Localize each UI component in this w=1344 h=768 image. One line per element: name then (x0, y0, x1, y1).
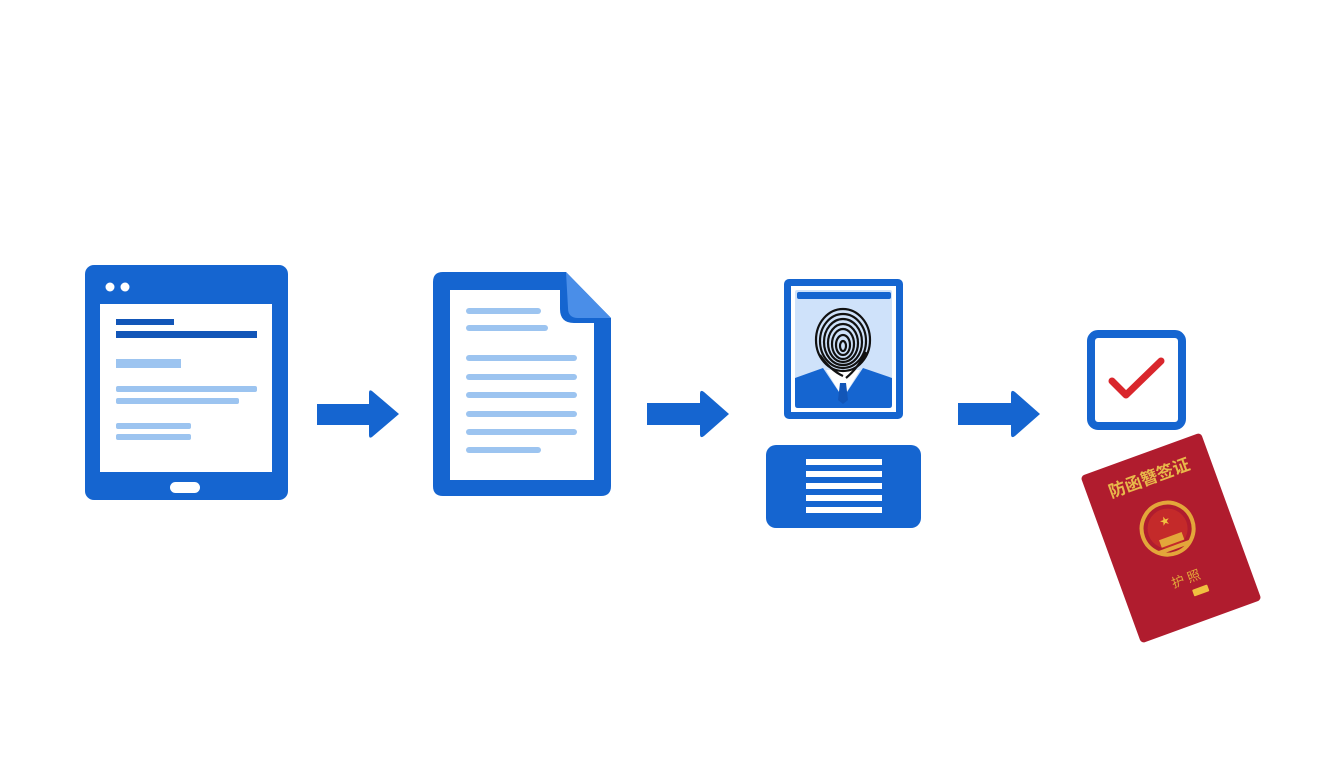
icon: checkbox (1091, 334, 1182, 426)
icon: biometric photo card with fingerprint (784, 279, 903, 419)
emblem: ★ (1157, 513, 1172, 530)
arrow 3 (958, 391, 1040, 437)
icon: passport: 护 照 (1169, 567, 1202, 591)
passport title: 防函簪签证 (1106, 454, 1192, 502)
fingerprint (816, 309, 870, 378)
icon: tablet application form (85, 265, 288, 500)
emblem (1134, 495, 1201, 562)
icon: document (433, 272, 611, 496)
suit (795, 368, 892, 408)
arrow 1 (317, 390, 399, 438)
arrow 2 (647, 391, 729, 437)
icon: passport (1080, 432, 1262, 644)
icon: card reader panel (766, 445, 921, 528)
